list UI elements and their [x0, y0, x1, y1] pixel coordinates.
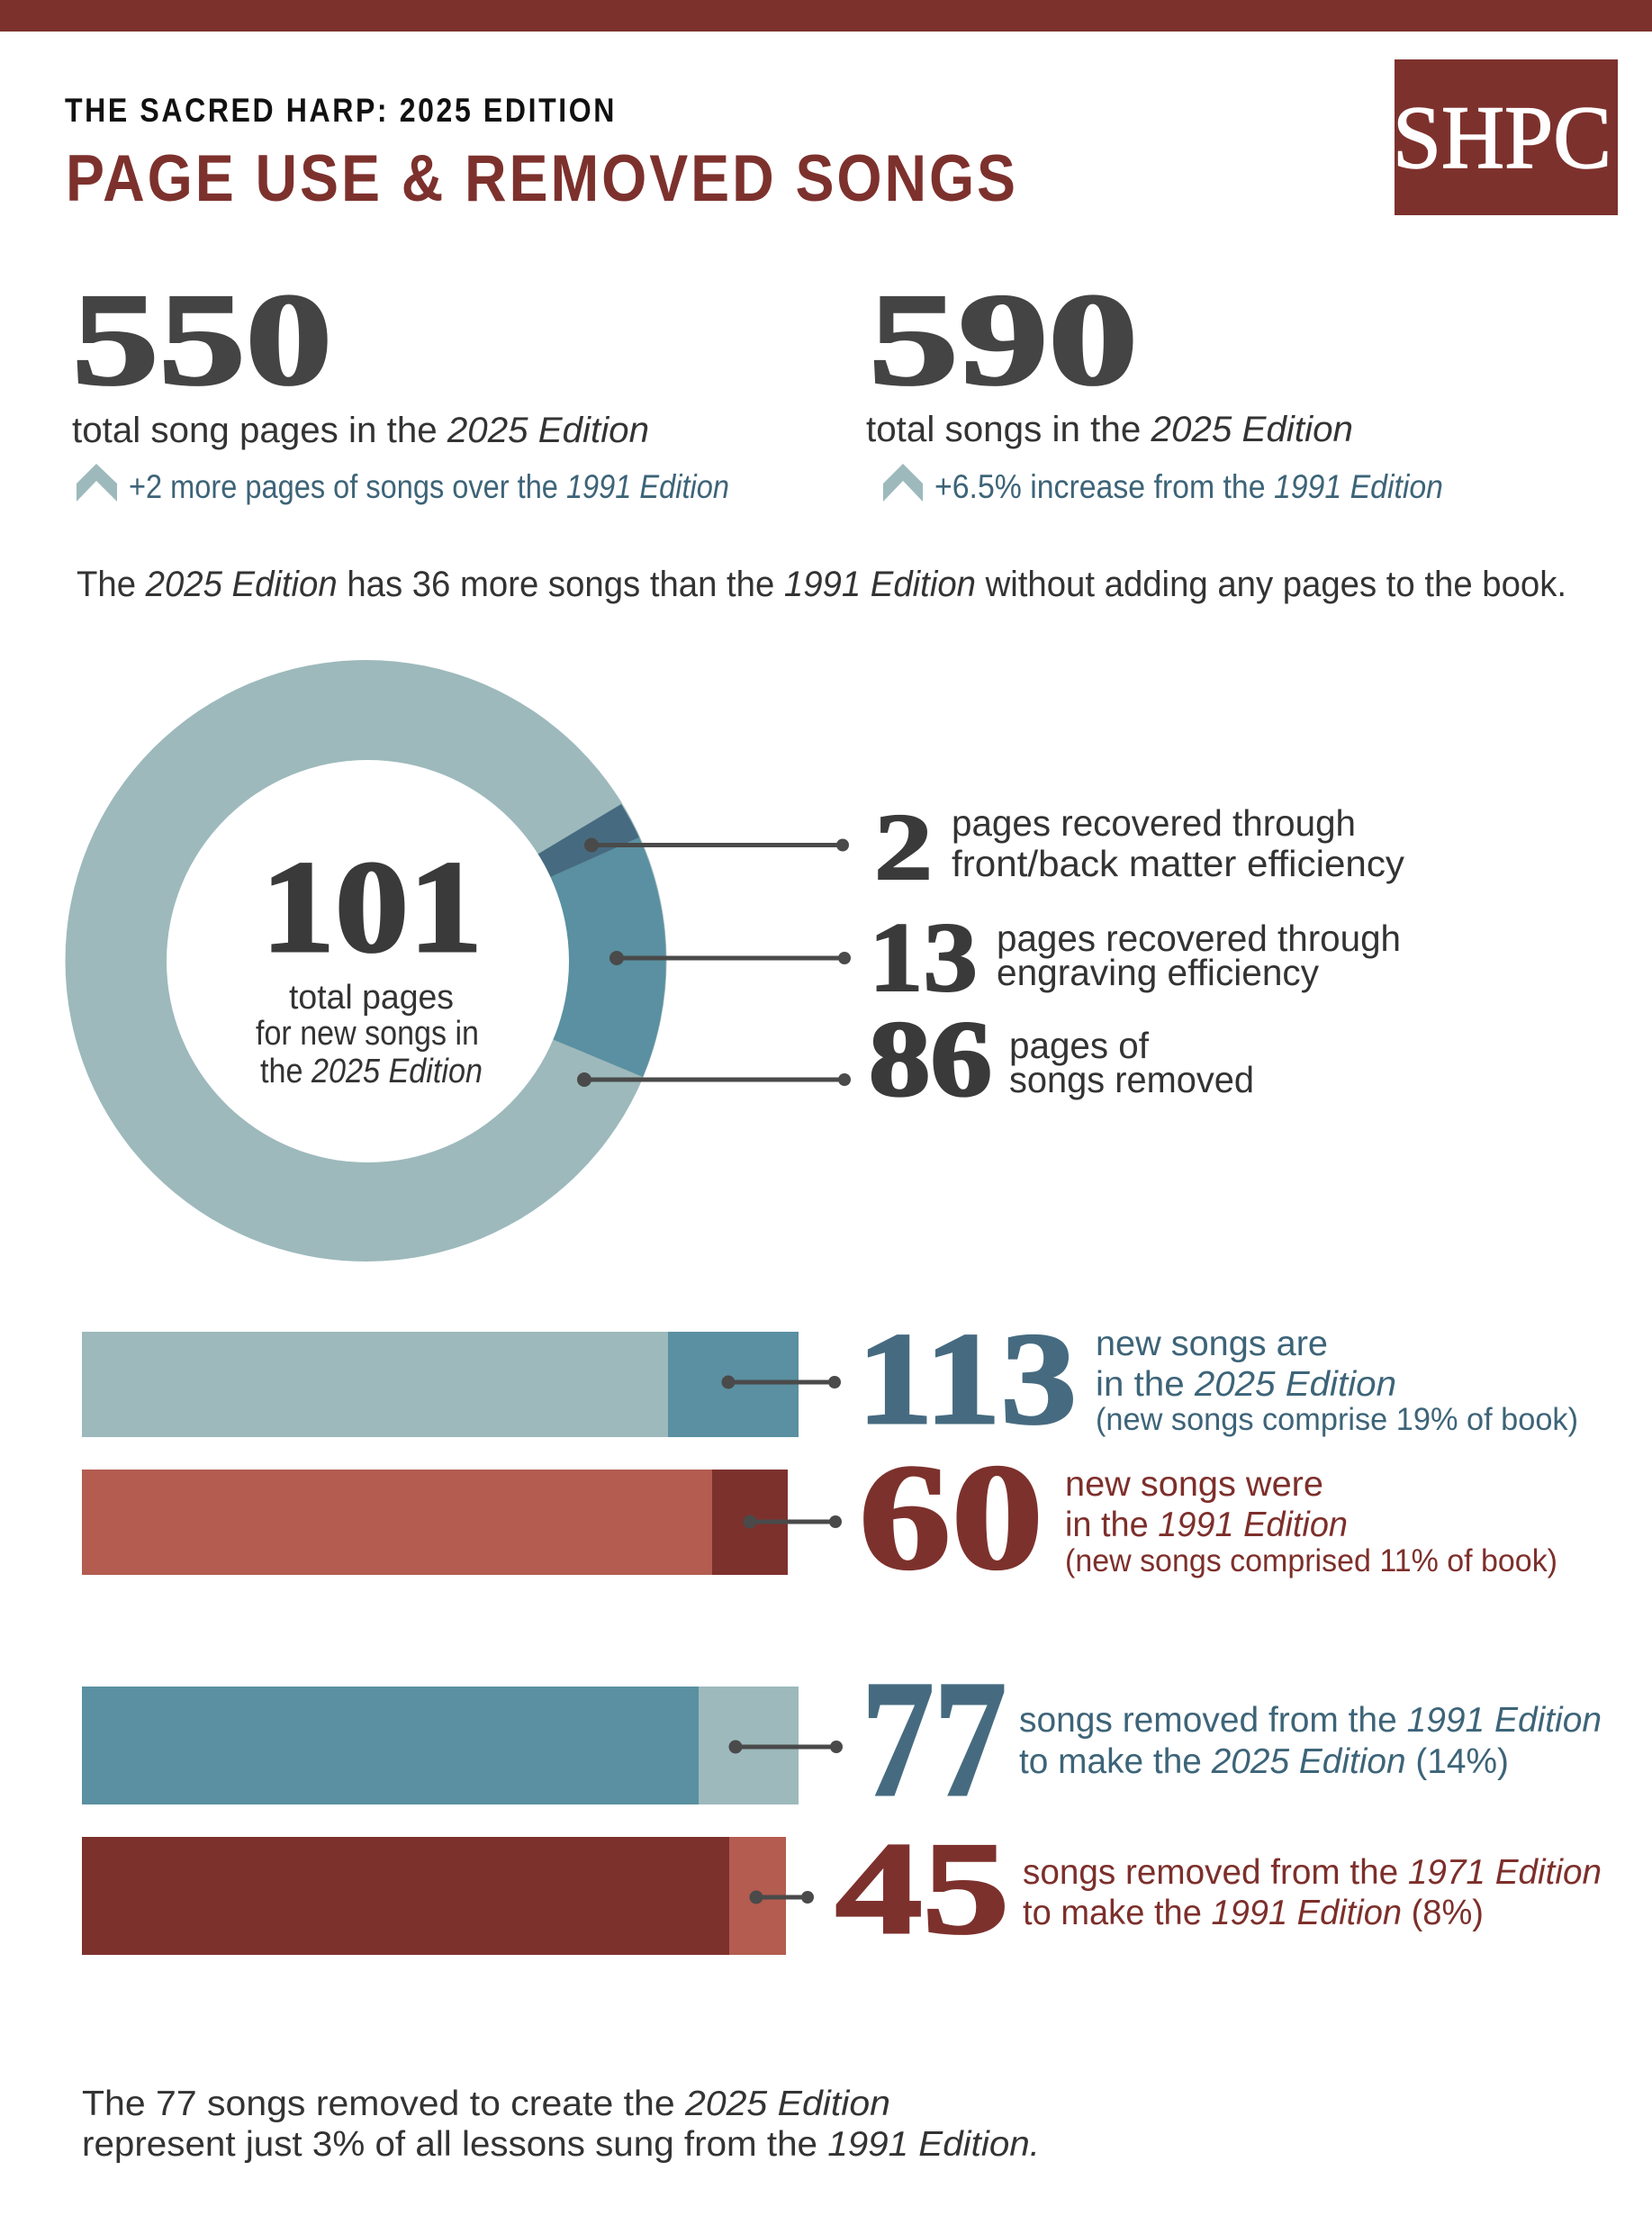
- icon: up chevron: [77, 464, 117, 502]
- number 550: 550: [72, 267, 332, 412]
- center label: [256, 979, 483, 1090]
- label: pages of: [1009, 1025, 1150, 1066]
- segment: engraving efficiency: [538, 837, 666, 1077]
- label: engraving efficiency: [997, 952, 1319, 993]
- center label: for new songs in: [256, 1015, 479, 1053]
- bar segments: [82, 1837, 786, 1955]
- connector: [609, 951, 851, 965]
- connector: [577, 1072, 851, 1087]
- closing note: [82, 2085, 1040, 2164]
- label: songs removed from the 1991 Edition: [1019, 1701, 1602, 1740]
- label: [997, 918, 1401, 993]
- label: in the 2025 Edition: [1096, 1365, 1396, 1404]
- label: front/back matter efficiency: [952, 843, 1405, 884]
- label: to make the 1991 Edition (8%): [1023, 1894, 1484, 1932]
- change note: +6.5% increase from the 1991 Edition: [934, 468, 1443, 505]
- center label: the 2025 Edition: [260, 1053, 483, 1090]
- supertitle: THE SACRED HARP: 2025 EDITION: [65, 92, 617, 129]
- segment: front/back matter: [527, 804, 639, 882]
- donut chart: [65, 660, 666, 1262]
- label: [1009, 1025, 1254, 1100]
- label: (new songs comprise 19% of book): [1096, 1402, 1578, 1437]
- connector: [749, 1891, 814, 1904]
- bar segments: [82, 1332, 799, 1437]
- icon: up chevron: [883, 464, 923, 502]
- header titles: [65, 92, 1018, 215]
- logo: SHPC: SHPC: [1393, 87, 1611, 187]
- bar segments: [82, 1470, 788, 1575]
- donut hole: [167, 760, 569, 1162]
- label: pages recovered through: [952, 802, 1356, 844]
- label: [1096, 1325, 1578, 1437]
- number: 45: [835, 1815, 1009, 1961]
- label: new songs were: [1065, 1465, 1323, 1504]
- label: in the 1991 Edition: [1065, 1506, 1348, 1544]
- stat: 550 total song pages: [72, 267, 729, 505]
- closing note: The 77 songs removed to create the 2025 Edition: [82, 2085, 890, 2123]
- label: pages recovered through: [997, 918, 1401, 959]
- connector: [729, 1740, 843, 1754]
- callout: 2 pages: [584, 794, 1405, 900]
- center number: 101: [261, 834, 483, 980]
- callout: 13 pages: [609, 902, 1401, 1012]
- bar segments: [82, 1687, 799, 1804]
- connector: [584, 837, 849, 852]
- number: 60: [859, 1434, 1043, 1601]
- change note: +2 more pages of songs over the 1991 Edition: [129, 468, 729, 505]
- bar: 60 new songs in 1991 Edition: [82, 1434, 1557, 1601]
- label: (new songs comprised 11% of book): [1065, 1543, 1557, 1578]
- label: total song pages in the 2025 Edition: [72, 411, 649, 450]
- bar: 45 songs removed: [82, 1815, 1602, 1961]
- label: new songs are: [1096, 1325, 1328, 1363]
- label: [1065, 1465, 1557, 1578]
- label: songs removed: [1009, 1059, 1254, 1100]
- donut base: [65, 660, 666, 1262]
- label: total songs in the 2025 Edition: [866, 410, 1353, 449]
- label: to make the 2025 Edition (14%): [1019, 1742, 1509, 1781]
- number: 77: [862, 1647, 1007, 1832]
- main title: PAGE USE & REMOVED SONGS: [66, 142, 1018, 215]
- connector: [744, 1515, 842, 1529]
- summary sentence: The 2025 Edition has 36 more songs than the 1991 Edition without adding any pages to the book.: [77, 565, 1566, 604]
- connector: [722, 1376, 841, 1388]
- number: 2: [874, 794, 933, 900]
- label: [1019, 1701, 1602, 1781]
- label: songs removed from the 1971 Edition: [1023, 1853, 1602, 1892]
- bar: 113 new songs in 2025 Edition: [82, 1306, 1578, 1452]
- bar: 77 songs removed: [82, 1647, 1602, 1832]
- number: 113: [857, 1306, 1077, 1452]
- label: [1023, 1853, 1602, 1932]
- logo: SHPC: [1393, 59, 1618, 215]
- callout: 86 pages: [577, 999, 1254, 1118]
- center label: total pages: [289, 979, 454, 1017]
- number: 86: [869, 999, 992, 1118]
- stat: 590 total songs: [866, 267, 1443, 505]
- number: 13: [869, 902, 978, 1012]
- closing note: represent just 3% of all lessons sung from the 1991 Edition.: [82, 2125, 1040, 2164]
- number 590: 590: [869, 267, 1138, 412]
- label: [952, 802, 1405, 884]
- top banner: [0, 0, 1652, 32]
